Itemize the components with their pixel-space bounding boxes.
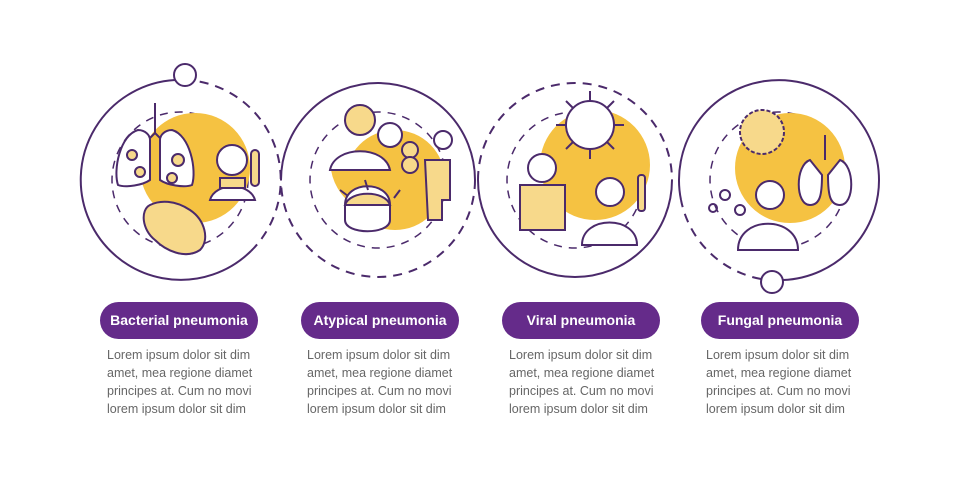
label: atypical — [301, 302, 459, 339]
circle 3: viral — [478, 83, 672, 277]
diagram circles — [80, 63, 880, 294]
circle 1: bacterial — [81, 64, 281, 280]
text: fungal: Lorem ipsum dolor sit dim amet, mea regione diamet principes at. Cum no movi lorem ipsum dolor sit dim — [706, 348, 851, 416]
label: viral: Viral pneumonia — [527, 312, 635, 328]
circle 4: fungal — [679, 80, 879, 293]
circle 2: atypical — [281, 83, 475, 277]
text: atypical: Lorem ipsum dolor sit dim amet, mea regione diamet principes at. Cum no movi lorem ipsum dolor sit dim — [307, 348, 452, 416]
text: bacterial: Lorem ipsum dolor sit dim amet, mea regione diamet principes at. Cum no movi lorem ipsum dolor sit dim — [107, 348, 252, 416]
label: viral — [502, 302, 660, 339]
text: viral: Lorem ipsum dolor sit dim amet, mea regione diamet principes at. Cum no movi lorem ipsum dolor sit dim — [509, 348, 654, 416]
label: fungal: Fungal pneumonia — [718, 312, 842, 328]
label: fungal — [701, 302, 859, 339]
label: atypical: Atypical pneumonia — [313, 312, 447, 328]
label: bacterial: Bacterial pneumonia — [110, 312, 248, 328]
label: bacterial — [100, 302, 258, 339]
